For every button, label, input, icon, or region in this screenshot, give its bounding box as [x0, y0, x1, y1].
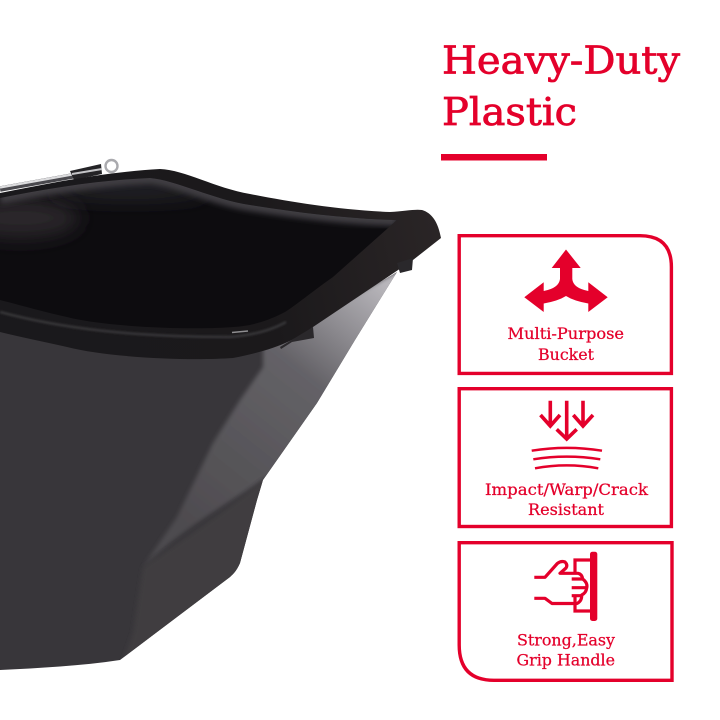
title: Heavy-Duty — [442, 38, 681, 82]
icon: three-way arrows — [524, 250, 608, 312]
label: Impact/Warp/Crack — [485, 481, 649, 499]
label: Resistant — [528, 501, 605, 519]
bucket rim — [0, 169, 441, 359]
label — [508, 325, 624, 364]
label — [485, 481, 649, 519]
title underline — [441, 154, 547, 160]
body lower facet — [122, 480, 263, 658]
rim tabs — [280, 258, 413, 349]
panel frame — [459, 389, 671, 526]
panel: multi-purpose bucket — [459, 236, 671, 373]
title: Plastic — [442, 90, 577, 134]
bucket interior — [0, 178, 396, 328]
photo: black plastic bucket — [0, 160, 441, 670]
label: Grip Handle — [516, 652, 615, 670]
panel frame — [459, 543, 672, 680]
label: Strong,Easy — [517, 632, 615, 650]
panel frame — [459, 236, 671, 373]
panel: impact resistant — [459, 389, 671, 526]
panel: grip handle — [459, 543, 672, 680]
bucket body — [0, 270, 400, 670]
body light side facet — [143, 270, 400, 567]
icon: arrows striking surface — [532, 401, 602, 468]
label: Bucket — [538, 346, 595, 364]
bucket handle — [0, 160, 118, 189]
rim highlight — [0, 312, 286, 337]
label — [516, 632, 615, 670]
icon: hand gripping handle — [534, 552, 597, 621]
title — [442, 38, 681, 134]
label: Multi-Purpose — [508, 325, 624, 343]
